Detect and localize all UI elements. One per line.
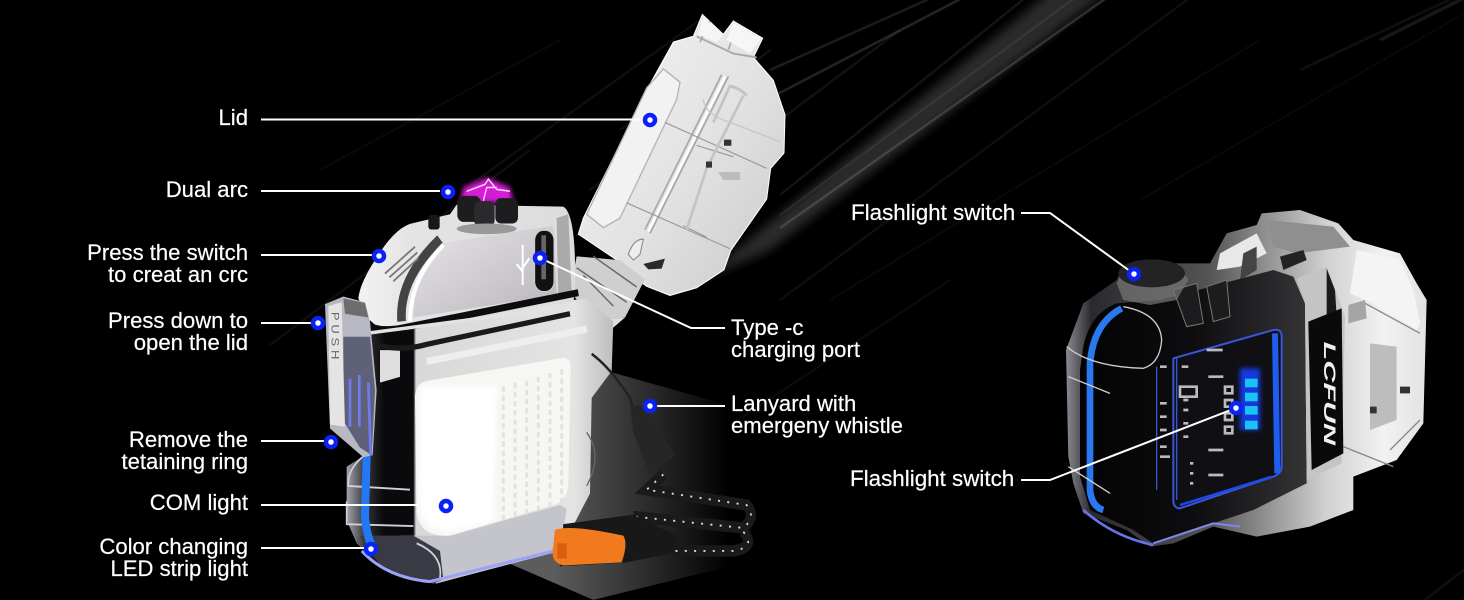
labels: left column: [87, 105, 248, 581]
labels: right of product: Type -c: [731, 315, 803, 340]
blue strip: [1090, 308, 1122, 510]
labels: right of product: [731, 200, 1015, 491]
circuit window: [1173, 330, 1282, 508]
labels: left column: COM light: [150, 490, 248, 515]
lanyard: [553, 354, 751, 566]
brand plate: [1308, 308, 1343, 470]
labels: left column: LED strip light: [110, 556, 248, 581]
right product: closed lighter: [1066, 210, 1427, 547]
lower wedge: [400, 505, 567, 583]
metal top: [358, 205, 575, 329]
left product: open lighter: [325, 15, 785, 600]
button: [1117, 267, 1188, 305]
callout lines: [261, 120, 1236, 548]
labels: left column: open the lid: [134, 330, 248, 355]
labels: left column: Remove the: [129, 427, 248, 452]
push clip: [325, 297, 377, 457]
light beam: [507, 360, 730, 600]
silver reflection: [380, 350, 400, 383]
labels: left column: Press down to: [108, 308, 248, 333]
arc electrodes: [428, 178, 518, 234]
usb port: [535, 230, 554, 292]
clear case: [1066, 210, 1427, 547]
dark body: [1080, 270, 1307, 543]
labels: right of product: Flashlight switch: [851, 200, 1015, 225]
labels: left column: to creat an crc: [108, 262, 248, 287]
labels: left column: tetaining ring: [121, 449, 248, 474]
labels: right of product: Lanyard with: [731, 391, 856, 416]
brand plate: LCFUN: [1320, 342, 1339, 447]
hinge: [570, 256, 645, 321]
honeycomb: [503, 369, 562, 524]
labels: left column: Lid: [219, 105, 248, 130]
labels: right of product: charging port: [731, 337, 860, 362]
rounded glass bands: [1067, 307, 1162, 493]
push clip: PUSH: [329, 312, 342, 363]
callout dots: [313, 115, 1241, 554]
labels: right of product: emergeny whistle: [731, 413, 903, 438]
gaskets: [368, 293, 578, 330]
whistle: [560, 515, 677, 566]
labels: left column: Press the switch: [87, 240, 248, 265]
labels: left column: Dual arc: [166, 177, 248, 202]
led meter: [1240, 368, 1260, 430]
bottom clear case: [347, 298, 613, 583]
cob light: [415, 358, 571, 536]
labels: right of product: Flashlight switch: [850, 466, 1014, 491]
suction bump: [587, 432, 595, 486]
lid: [578, 15, 785, 295]
labels: left column: Color changing: [99, 534, 248, 559]
